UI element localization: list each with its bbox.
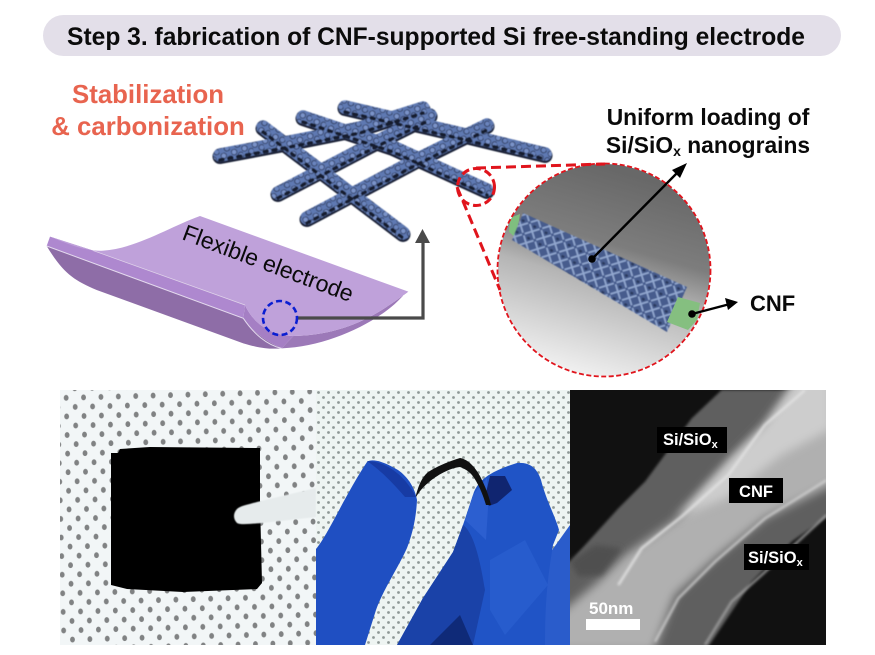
blue dashed circle: [263, 301, 297, 335]
arrow: Si/SiOx callout: [588, 163, 687, 263]
microscopy image: [570, 390, 826, 645]
green CNF core near end: [667, 297, 700, 330]
callout: uniform loading: Uniform loading of: [607, 104, 810, 130]
heading: stabilization and carbonization: [51, 81, 245, 141]
fiber tube: [512, 213, 687, 332]
label: flexible electrode: Flexible electrode: [179, 219, 357, 307]
right finger: [397, 463, 559, 645]
left finger: [316, 460, 417, 645]
flexible electrode sheet: [47, 216, 408, 349]
fiber network: [220, 107, 545, 238]
white swab: [234, 488, 316, 524]
bright core ridge: [675, 390, 826, 518]
heading: stabilization and carbonization: Stabilization: [72, 81, 224, 109]
callout: uniform loading: Si/SiO: [606, 132, 673, 158]
callout: CNF: CNF: [750, 291, 795, 316]
SEM label: Si/SiOx lower: x: [797, 557, 804, 569]
scale bar: 50nm: [589, 599, 633, 618]
SEM label: Si/SiOx lower: Si/SiO: [748, 549, 797, 567]
title: Step 3. fabrication of CNF-supported Si free-standing electrode: [67, 24, 805, 51]
arrow: CNF callout: [688, 298, 738, 318]
SEM label: CNF: CNF: [739, 483, 773, 501]
SEM label: Si/SiOx upper: x: [712, 439, 719, 451]
outer Si/SiOx shell: [562, 390, 832, 652]
third finger: [545, 525, 570, 645]
arrow: electrode to network: [297, 229, 430, 318]
red zoom outline: [457, 164, 710, 376]
title: [43, 15, 841, 56]
heading: stabilization and carbonization: & carbonization: [51, 113, 245, 141]
SEM label: Si/SiOx upper: Si/SiO: [663, 431, 712, 449]
SEM label: Si/SiOx lower: [744, 544, 809, 570]
dark lobe: [570, 545, 622, 577]
callout: uniform loading: [606, 104, 810, 159]
photo: bent electrode held by gloved fingers: [316, 390, 570, 645]
SEM label: CNF: [729, 478, 783, 503]
green CNF core far end: [509, 214, 520, 238]
magnified view: [498, 164, 710, 376]
bent black strip: [416, 458, 491, 505]
callout: uniform loading: x: [673, 143, 681, 159]
black sheet: [111, 447, 262, 592]
photo: black electrode sheet: [60, 390, 316, 645]
scale bar: [586, 599, 640, 630]
SEM label: Si/SiOx upper: [657, 427, 727, 453]
callout: uniform loading: nanograins: [681, 132, 810, 158]
bright edges: [618, 390, 805, 585]
CNF core: [570, 390, 826, 645]
